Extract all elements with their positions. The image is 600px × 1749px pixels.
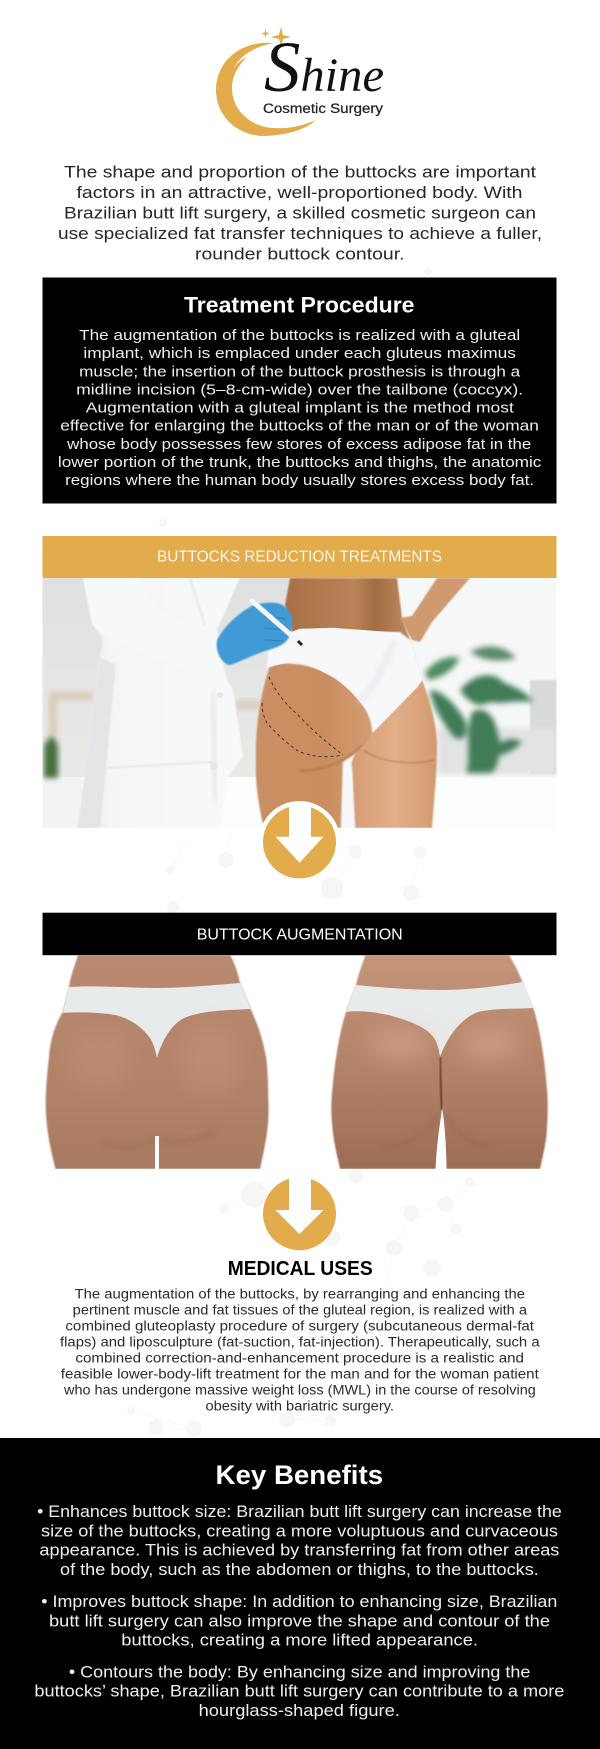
intro paragraph: [58, 163, 542, 263]
panel: buttock augmentation band: [42, 913, 556, 955]
benefit: contours the body: hourglass-shaped figure.: [199, 1701, 400, 1720]
text block: medical uses description: feasible lower-body-lift treatment for the man and for the woman patient: [61, 1366, 539, 1381]
heading: key benefits: Key Benefits: [216, 1460, 383, 1490]
text block: procedure description: The augmentation of the buttocks is realized with a gluteal: [79, 327, 520, 344]
text block: medical uses description: The augmentation of the buttocks, by rearranging and enhancing the: [75, 1286, 525, 1301]
benefit: contours the body: • Contours the body: By enhancing size and improving the: [69, 1662, 530, 1681]
benefit: contours the body: [34, 1662, 564, 1720]
text block: medical uses description: who has undergone massive weight loss (MWL) in the course of resolving: [63, 1382, 536, 1397]
marker pen: [250, 598, 292, 638]
text block: medical uses description: obesity with bariatric surgery.: [206, 1398, 394, 1413]
intro paragraph: Brazilian butt lift surgery, a skilled cosmetic surgeon can: [64, 204, 536, 222]
model legs and hips: [256, 664, 437, 828]
icon: down arrow 2: [263, 1175, 336, 1250]
benefit: enhances buttock size: of the body, such as the abdomen or thighs, to the buttocks.: [60, 1560, 539, 1579]
doctor white coat: [78, 578, 243, 828]
white briefs: [267, 628, 422, 732]
after figure: [331, 955, 548, 1169]
text block: procedure description: [58, 327, 542, 489]
heading: medical uses: MEDICAL USES: [228, 1258, 373, 1280]
heading: treatment procedure: Treatment Procedure: [184, 293, 414, 318]
text block: procedure description: regions where the human body usually stores excess body fat.: [65, 472, 534, 489]
text block: medical uses description: flaps) and liposculpture (fat-suction, fat-injection). Therapeutically, such a: [60, 1334, 540, 1349]
text block: medical uses description: [60, 1286, 540, 1413]
intro paragraph: use specialized fat transfer techniques to achieve a fuller,: [58, 224, 542, 243]
panel: treatment procedure: [42, 278, 556, 504]
benefit: enhances buttock size: appearance. This is achieved by transferring fat from other areas: [39, 1541, 559, 1560]
icon: down arrow 1: [258, 801, 340, 883]
benefit: contours the body: buttocks’ shape, Brazilian butt lift surgery can contribute to a more: [34, 1682, 564, 1701]
text block: procedure description: muscle; the insertion of the buttock prosthesis is through a: [79, 363, 521, 380]
intro paragraph: The shape and proportion of the buttocks are important: [64, 163, 536, 182]
plant leaves: [425, 646, 533, 773]
icon: gold crescent moon: [216, 43, 316, 136]
text block: medical uses description: combined correction-and-enhancement procedure is a realistic and: [75, 1350, 524, 1365]
text block: procedure description: midline incision (5–8-cm-wide) over the tailbone (coccyx).: [76, 381, 523, 398]
photo: surgeon marking treatment area: [42, 578, 557, 828]
benefit: enhances buttock size: [37, 1502, 562, 1579]
text block: procedure description: whose body possesses few stores of excess adipose fat in the: [66, 436, 531, 453]
before figure: [46, 955, 269, 1169]
icon: small star: [261, 29, 270, 38]
text block: procedure description: effective for enlarging the buttocks of the man or of the woman: [60, 418, 539, 435]
photo: before and after comparison: [46, 955, 548, 1169]
benefit: improves buttock shape: butt lift surgery can also improve the shape and contour of the: [49, 1611, 550, 1630]
benefit: enhances buttock size: • Enhances buttock size: Brazilian butt lift surgery can increase the: [37, 1502, 562, 1521]
intro paragraph: factors in an attractive, well-proportioned body. With: [76, 183, 522, 202]
text block: procedure description: Augmentation with a gluteal implant is the method most: [86, 400, 515, 416]
model arm and torso: [285, 578, 410, 640]
benefit: improves buttock shape: [41, 1592, 557, 1649]
text block: procedure description: lower portion of the trunk, the buttocks and thighs, the anatomic: [58, 454, 542, 471]
icon: large star: [271, 27, 291, 47]
benefit: enhances buttock size: size of the buttocks, creating a more voluptuous and curvaceous: [41, 1521, 558, 1540]
logo tagline: Cosmetic Surgery: [263, 101, 383, 116]
heading: buttocks reduction treatments: BUTTOCKS REDUCTION TREATMENTS: [157, 549, 442, 566]
text block: medical uses description: combined gluteoplasty procedure of surgery (subcutaneous dermal-fat: [65, 1318, 534, 1333]
panel: buttocks reduction treatments band: [42, 536, 556, 578]
text block: procedure description: implant, which is emplaced under each gluteus maximus: [83, 345, 516, 362]
benefit: improves buttock shape: buttocks, creating a more lifted appearance.: [121, 1630, 478, 1649]
heading: buttock augmentation: BUTTOCK AUGMENTATION: [197, 926, 403, 943]
panel: key benefits: [0, 1438, 600, 1749]
logo: Shine Cosmetic Surgery: [216, 27, 384, 136]
logo wordmark: Shine: [264, 27, 384, 107]
intro paragraph: rounder buttock contour.: [195, 244, 404, 263]
dotted surgical marking lines: [262, 677, 343, 757]
text block: medical uses description: pertinent muscle and fat tissues of the gluteal region, is realized with a: [73, 1302, 528, 1317]
benefit: improves buttock shape: • Improves buttock shape: In addition to enhancing size, Brazilian: [41, 1592, 557, 1611]
blue surgical glove: [217, 603, 293, 665]
